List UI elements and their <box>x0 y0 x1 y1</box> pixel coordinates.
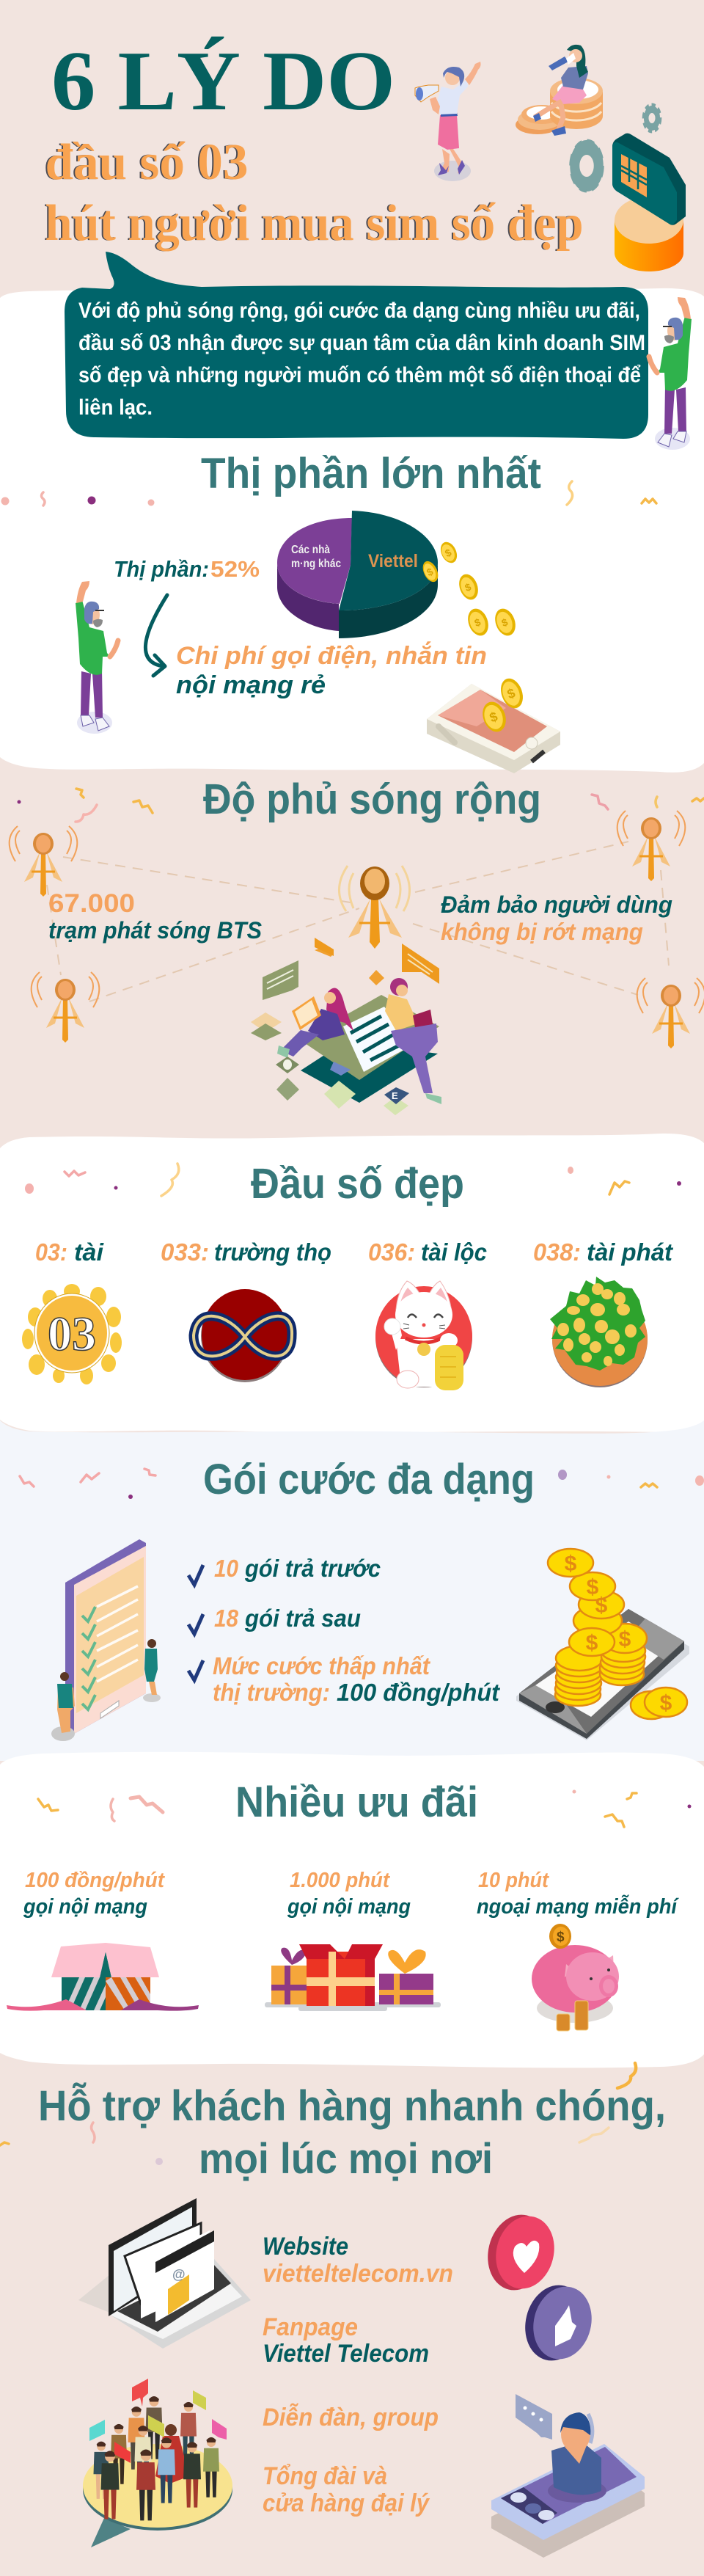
text: share 52%: 52% <box>210 556 260 582</box>
text: 18 postpaid: 18 <box>214 1605 239 1632</box>
text: offer 1: gọi nội mạng <box>23 1895 147 1919</box>
icon: central tower <box>339 866 410 949</box>
text: lowest rate: 100 đồng/phút <box>337 1679 501 1706</box>
text: fanpage: Viettel Telecom <box>263 2340 429 2368</box>
icon: two people on tablet: E <box>392 1090 398 1101</box>
icon: laptop with windows: @ <box>172 2267 186 2282</box>
heading: coverage: Độ phủ sóng rộng <box>203 776 541 823</box>
text: others label: m·ng khác <box>291 558 341 570</box>
icon: falling coins: $ <box>473 616 483 629</box>
text: intro paragraph: Với độ phủ sóng rộng, gói cước đa dạng cùng nhiều ưu đãi, <box>78 299 640 323</box>
heading: market share: Thị phần lớn nhất <box>201 450 541 497</box>
icon: laptop with windows <box>78 2198 251 2349</box>
heading: customer support: mọi lúc mọi nơi <box>199 2135 493 2183</box>
icon: falling coins: $ <box>425 565 435 578</box>
text: offer 3: 10 phút <box>478 1869 549 1892</box>
icon: small tower top-left <box>10 826 77 897</box>
icon: infinity <box>194 1289 292 1382</box>
text: offer 2: gọi nội mạng <box>287 1895 411 1919</box>
icon: phone with coins: $ <box>505 685 517 701</box>
text: fanpage <box>263 2313 429 2368</box>
icon: SIM card on cylinder <box>612 134 686 271</box>
icon: two people on tablet <box>251 938 441 1115</box>
heading: plans: Gói cước đa dạng <box>203 1456 535 1503</box>
text: intro paragraph: liên lạc. <box>78 395 153 420</box>
text: prefix labels <box>35 1238 674 1266</box>
text: fanpage: Fanpage <box>263 2313 358 2341</box>
icon: woman with megaphone <box>415 62 481 181</box>
confetti: plans <box>20 1469 704 1499</box>
text: prefix labels: tài lộc <box>421 1238 487 1266</box>
text: offer 1 <box>23 1869 165 1919</box>
text: no dropped calls: Đảm bảo người dùng <box>441 891 672 918</box>
text: 10 prepaid: gói trả trước <box>244 1555 381 1582</box>
list: plan checks <box>188 1555 501 1706</box>
icon: thumbs up button <box>518 2279 599 2367</box>
icon: man with raised arm, share <box>76 581 118 734</box>
text: website: Website <box>263 2233 348 2261</box>
arrow: share to cost <box>145 595 167 676</box>
text: prefix labels: 033: <box>161 1238 209 1266</box>
heading: beautiful prefixes: Đầu số đẹp <box>251 1160 464 1208</box>
text: share 52%: Thị phần: <box>114 556 209 582</box>
text: prefix labels: tài <box>74 1238 104 1266</box>
icon: falling coins: $ <box>500 616 510 629</box>
icon: small tower bottom-left <box>32 972 99 1043</box>
panel: intro speech bubble <box>65 252 648 439</box>
text: cheap calls: Chi phí gọi điện, nhắn tin <box>176 642 487 670</box>
icon: phone with coins: $ <box>488 709 499 725</box>
text: cheap calls: nội mạng rẻ <box>176 671 326 699</box>
text: 18 postpaid: gói trả sau <box>244 1605 361 1632</box>
icon: small tower bottom-right <box>637 978 704 1048</box>
icon: phone with coin stacks: $ <box>619 1627 631 1652</box>
icon: phone with coin stacks <box>516 1549 689 1740</box>
chart: 3D pie market share <box>277 511 438 638</box>
panel: white offers <box>0 1752 704 2068</box>
icon: support agent on phone <box>491 2394 645 2558</box>
text: lowest rate: thị trường: <box>213 1679 330 1706</box>
icon: falling coins: $ <box>443 546 453 559</box>
text: prefix labels: 038: <box>533 1238 581 1266</box>
text: 67.000 BTS: 67.000 <box>48 889 135 918</box>
panel: white intro and market share <box>0 288 704 773</box>
subtitle block: đầu số 03 <box>45 134 248 191</box>
text: hotline and stores: cửa hàng đại lý <box>263 2489 430 2517</box>
text: prefix labels: trường thọ <box>214 1238 331 1266</box>
heading: offers: Nhiều ưu đãi <box>235 1778 478 1826</box>
text: prefix labels: tài phát <box>587 1238 674 1266</box>
icon: check <box>188 1614 203 1634</box>
panel: pale blue plans <box>0 1420 704 1761</box>
text: offer 3: ngoại mạng miễn phí <box>477 1894 680 1919</box>
icon: phone with coin stacks: $ <box>587 1575 599 1599</box>
text: others label: Các nhà <box>291 544 330 556</box>
text: website: vietteltelecom.vn <box>263 2260 453 2288</box>
text: prefix labels: 03: <box>35 1238 67 1266</box>
text: website <box>263 2233 453 2288</box>
text: prefix labels: 036: <box>368 1238 415 1266</box>
text: lowest rate <box>213 1652 501 1706</box>
icon: 03 coin <box>22 1284 122 1384</box>
title: 6 LÝ DO: 6 LÝ DO <box>51 34 395 128</box>
icon: gears <box>571 105 661 190</box>
icon: open striped gift <box>7 1943 199 2011</box>
text: offer 2 <box>287 1869 411 1919</box>
text: 10 prepaid: 10 <box>214 1555 239 1582</box>
text: no dropped calls <box>441 891 672 945</box>
icon: falling coins <box>420 539 519 638</box>
text: offer 2: 1.000 phút <box>290 1869 390 1892</box>
text: 67.000 BTS: trạm phát sóng BTS <box>48 917 263 944</box>
text: no dropped calls: không bị rớt mạng <box>441 919 643 945</box>
icon: heart button <box>480 2208 562 2296</box>
confetti: prefixes <box>25 1164 681 1196</box>
icon: phone with coin stacks: $ <box>595 1594 608 1618</box>
icon: check <box>188 1660 203 1680</box>
icon: money plant <box>550 1277 648 1387</box>
subtitle block: hút người mua sim số đẹp <box>44 195 582 252</box>
icon: small tower top-right <box>617 811 685 881</box>
confetti: market share <box>1 481 656 506</box>
icon: phone with coins <box>427 675 560 773</box>
text: Viettel label: Viettel <box>368 551 418 572</box>
text: offer 1: 100 đồng/phút <box>25 1869 165 1892</box>
icon: piggy bank: $ <box>557 1930 565 1945</box>
text: intro paragraph: số đẹp và những người muốn có thêm một số điện thoại để <box>78 363 641 387</box>
icon: gift boxes <box>265 1944 441 2011</box>
icon: lucky cat <box>375 1281 472 1390</box>
icon: check <box>188 1565 203 1585</box>
text: cheap calls <box>176 642 487 699</box>
text: intro paragraph: đầu số 03 nhận được sự quan tâm của dân kinh doanh SIM <box>78 331 645 355</box>
icon: phone with coin stacks: $ <box>565 1552 577 1576</box>
icon: phone with coin stacks: $ <box>586 1631 598 1655</box>
lines: tower network <box>47 842 669 1001</box>
text: forum: Diễn đàn, group <box>263 2404 439 2431</box>
heading: customer support: Hỗ trợ khách hàng nhanh chóng, <box>38 2082 666 2130</box>
icon: checklist phone with people <box>51 1539 161 1741</box>
confetti: support <box>0 2063 636 2165</box>
heading: customer support <box>38 2082 666 2183</box>
text: offer 3 <box>477 1869 680 1919</box>
text: lowest rate: Mức cước thấp nhất <box>213 1652 431 1679</box>
text: intro paragraph <box>78 299 645 420</box>
icon: phone with coin stacks: $ <box>660 1691 672 1715</box>
icon: woman sitting on coin stacks <box>516 45 603 136</box>
confetti: offers <box>38 1790 691 1827</box>
confetti: coverage <box>18 789 704 822</box>
icon: man with raised arm, top <box>649 297 692 450</box>
subtitle block <box>44 134 584 252</box>
icon: crowd in speech bubble <box>83 2379 232 2547</box>
text: hotline and stores <box>263 2462 430 2517</box>
text: hotline and stores: Tổng đài và <box>263 2462 387 2490</box>
icon: falling coins: $ <box>463 580 473 594</box>
subtitle block: hút người mua sim số đẹp <box>45 195 584 252</box>
icon: 03 coin: 03 <box>48 1307 96 1361</box>
text: 67.000 BTS <box>48 889 263 944</box>
panel: white beautiful prefixes <box>0 1134 704 1432</box>
subtitle block: đầu số 03 <box>44 134 246 191</box>
text: others label <box>291 544 341 570</box>
icon: piggy bank <box>532 1924 619 2031</box>
